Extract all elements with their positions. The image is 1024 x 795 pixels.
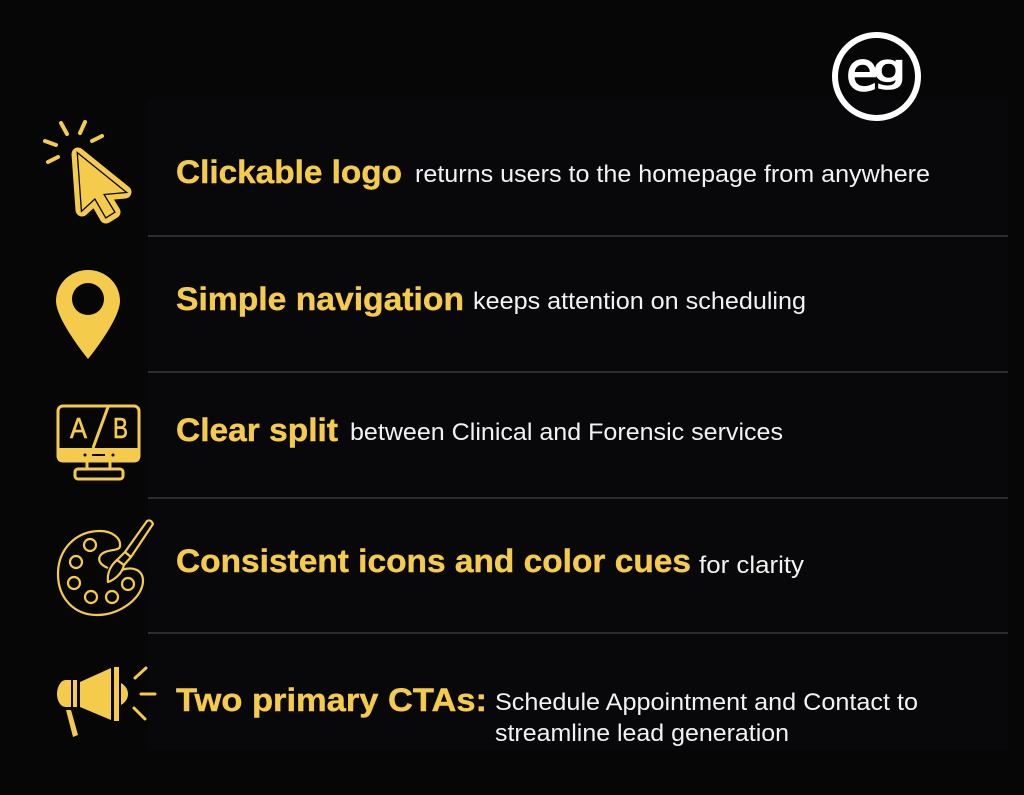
row: clear split: Clear split	[176, 412, 338, 448]
row: simple navigation	[176, 281, 806, 317]
icon: cursor click	[45, 122, 125, 217]
icon: A/B monitor: B	[113, 413, 128, 445]
logo: e	[846, 40, 878, 103]
row: clear split	[176, 412, 783, 448]
icon: A/B monitor: A	[70, 413, 88, 445]
logo	[835, 35, 918, 118]
row: two primary CTAs: Two primary CTAs:	[176, 682, 487, 718]
row: two primary CTAs: streamline lead generation	[495, 720, 789, 747]
row: two primary CTAs: Schedule Appointment and Contact to	[495, 689, 918, 716]
row: two primary CTAs	[176, 682, 918, 747]
row: clickable logo: returns users to the homepage from anywhere	[415, 161, 930, 188]
row: consistent icons: for clarity	[699, 552, 804, 579]
icon: paint palette	[58, 520, 153, 615]
row: simple navigation: Simple navigation	[176, 281, 464, 317]
row: clickable logo	[176, 154, 930, 190]
row: simple navigation: keeps attention on scheduling	[473, 288, 806, 315]
row: consistent icons: Consistent icons and color cues	[176, 543, 691, 579]
row: clickable logo: Clickable logo	[176, 154, 402, 190]
icon: A/B monitor	[57, 406, 140, 479]
icon: megaphone	[57, 667, 155, 737]
row: clear split: between Clinical and Forensic services	[350, 419, 783, 446]
logo: g	[873, 47, 906, 90]
icon: map pin	[56, 270, 120, 359]
